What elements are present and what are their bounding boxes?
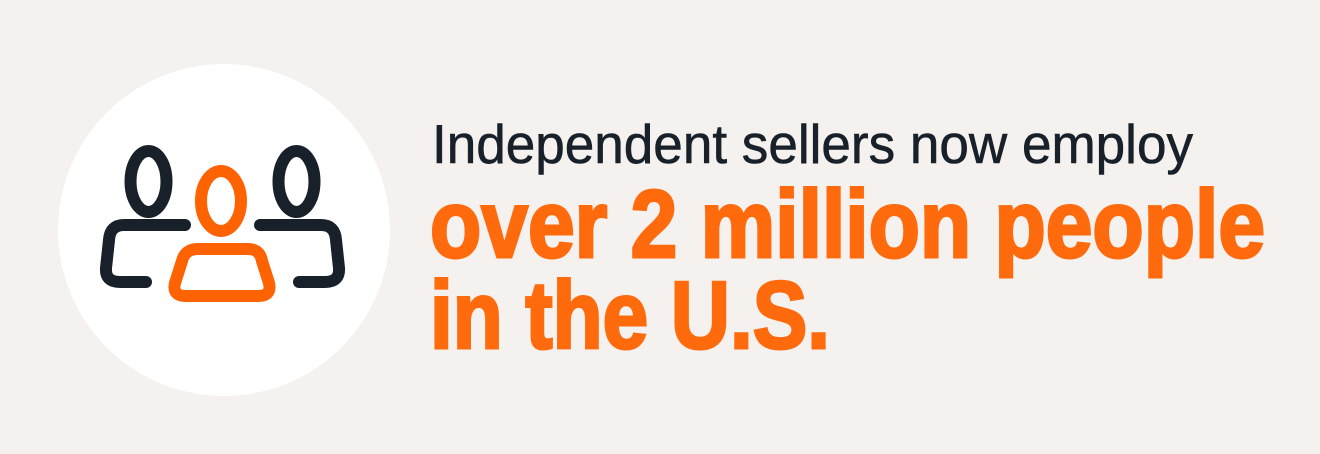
icon: center person (174, 171, 270, 296)
text: intro line: Independent sellers now employ (432, 113, 1193, 175)
text: headline line 2: in the U.S. (430, 262, 830, 369)
icon: left person (106, 151, 185, 282)
icon: people group in white circle (58, 64, 390, 396)
icon: right person (260, 151, 339, 282)
